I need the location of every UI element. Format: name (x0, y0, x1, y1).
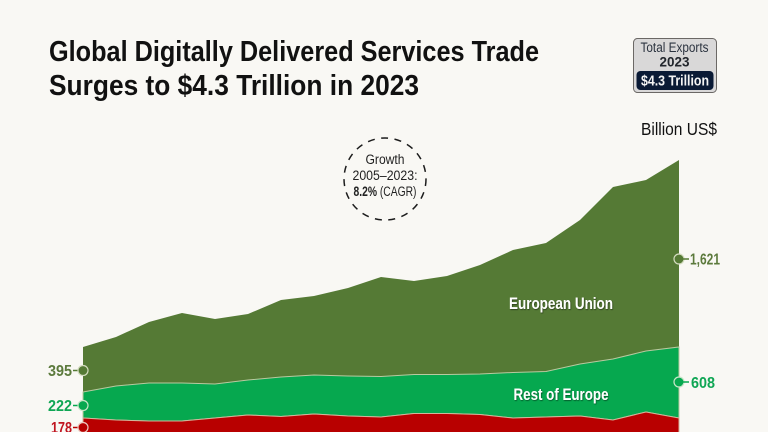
unit label: Billion US$ (641, 119, 717, 139)
marker: EU 2023 value: 1,621 (690, 252, 720, 268)
title: Global Digitally Delivered Services Trade (49, 36, 539, 68)
callout: total exports 2023: Total Exports (640, 40, 709, 55)
marker: Rest of Europe 2023 value: 608 (691, 375, 715, 392)
marker: EU 2005 value (48, 363, 88, 380)
callout: total exports 2023: 2023 (660, 54, 690, 70)
title: Surges to $4.3 Trillion in 2023 (49, 70, 419, 102)
area: red segment (83, 412, 679, 432)
label: European Union: European Union (509, 294, 613, 313)
title (49, 36, 539, 102)
growth callout: 8.2% (CAGR) (354, 184, 416, 199)
marker: EU 2005 value: 395 (48, 363, 72, 380)
marker: Rest of Europe 2023 value (674, 375, 715, 392)
growth callout: 2005–2023: (352, 168, 418, 183)
marker: Rest of Europe 2005 value: 222 (48, 398, 72, 415)
marker: Rest of Europe 2005 value (48, 398, 88, 415)
callout: total exports 2023: $4.3 Trillion (641, 72, 709, 90)
marker: EU 2023 value (674, 252, 720, 268)
area: Rest of Europe (83, 347, 679, 421)
label: Rest of Europe: Rest of Europe (514, 385, 608, 404)
area: European Union (83, 160, 679, 392)
stacked area chart (83, 160, 679, 432)
growth callout (344, 138, 426, 220)
growth callout: Growth (366, 152, 404, 167)
callout: total exports 2023 (634, 38, 716, 92)
